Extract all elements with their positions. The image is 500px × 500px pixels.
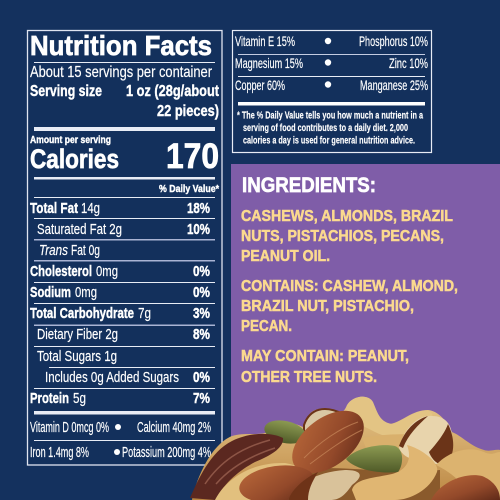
pecan [190,434,283,500]
row: cholesterol: 0mg [96,263,118,280]
text: ingredient list [241,208,453,265]
row: trans fat [39,242,100,259]
row: copper and manganese: Manganese 25% [360,77,428,93]
row: magnesium and zinc: Zinc 10% [389,55,428,71]
row: cholesterol [30,263,210,280]
row: iron and potassium [30,445,211,461]
cashew: left base [215,463,320,500]
row: iron and potassium: Potassium 200mg 4% [122,445,211,461]
almond: center [281,398,375,486]
text: daily value header: % Daily Value* [159,183,220,195]
cashew: middle [362,434,430,452]
row: total sugars: Total Sugars 1g [37,348,117,365]
row: protein: 7% [193,390,210,407]
row: vitamin e and phosphorus: Vitamin E 15% [235,33,295,49]
text: may contain: MAY CONTAIN: PEANUT, [241,348,409,365]
text: may contain: OTHER TREE NUTS. [241,369,377,386]
text: ingredient list: PEANUT OIL. [241,248,330,265]
row: total carbohydrate: Total Carbohydrate [30,305,134,322]
text: calories label: Calories [30,144,119,174]
row: protein [30,390,210,407]
heading: ingredients: INGREDIENTS: [242,173,376,197]
text: ingredient list: NUTS, PISTACHIOS, PECANS, [241,228,444,245]
row: protein: Protein [30,390,69,407]
row: sodium: 0% [193,284,210,301]
text: serving size: 1 oz (28g/about [126,83,220,100]
row: copper and manganese [235,77,428,93]
row: total carbohydrate: 7g [138,305,151,322]
text: calories value: 170 [166,137,219,176]
heading: nutrition facts: Nutrition Facts [30,30,212,61]
text: serving size [30,83,220,120]
row: dietary fiber [37,326,210,343]
cashew: top [347,397,432,437]
text: serving size: 22 pieces) [157,103,219,120]
row: total fat [30,200,210,217]
text: contains [241,278,458,335]
row: saturated fat: Saturated Fat 2g [37,221,122,238]
row: dietary fiber: Dietary Fiber 2g [37,326,118,343]
row: vitamin d and calcium: Calcium 40mg 2% [137,420,211,436]
text: amount per serving: Amount per serving [30,134,111,146]
row: trans fat: Trans [39,242,68,259]
cashew: right [436,449,500,500]
text: daily value footnote: calories a day is used for general nutrition advice. [243,134,415,146]
almond: lower right [431,475,500,500]
row: total carbohydrate: 3% [193,305,210,322]
text: daily value footnote [237,110,423,146]
text: daily value footnote: serving of food contributes to a daily diet. 2,000 [243,122,408,134]
row: sodium: Sodium [30,284,71,301]
cashew: lower [352,445,437,500]
row: copper and manganese: Copper 60% [235,77,285,93]
row: saturated fat: 10% [187,221,210,238]
pistachio: left [262,417,308,447]
row: magnesium and zinc: Magnesium 15% [235,55,303,71]
illustration: mixed nuts [190,397,500,500]
pistachio: center [346,445,402,472]
row: saturated fat [37,221,210,238]
text: servings per container: About 15 servings per container [30,64,213,81]
row: sodium [30,284,210,301]
text: contains: PECAN. [241,318,292,335]
row: vitamin d and calcium: Vitamin D 0mcg 0% [30,420,109,436]
panel: ingredients [231,164,500,500]
text: daily value footnote: * The % Daily Value tells you how much a nutrient in a [237,110,423,122]
row: vitamin e and phosphorus: Phosphorus 10% [359,33,428,49]
row: total fat: 14g [81,200,100,217]
panel: vitamins and footnote [232,30,432,152]
brazil nut: lower center [288,470,360,500]
row: total fat: Total Fat [30,200,78,217]
row: trans fat: Fat 0g [71,242,100,259]
shadow: between nuts [300,468,440,500]
text: contains: BRAZIL NUT, PISTACHIO, [241,298,414,315]
row: vitamin e and phosphorus [235,33,428,49]
row: cholesterol: 0% [193,263,210,280]
text: serving size: Serving size [30,83,102,100]
panel: nutrition facts [28,30,222,465]
row: magnesium and zinc [235,55,428,71]
row: dietary fiber: 8% [193,326,210,343]
row: sodium: 0mg [75,284,97,301]
row: added sugars: 0% [193,369,210,386]
almond: lower left [237,461,317,500]
row: total fat: 18% [187,200,210,217]
row: iron and potassium: Iron 1.4mg 8% [30,445,89,461]
brazil nut: back [304,409,343,440]
text: may contain [241,348,409,386]
text: contains: CONTAINS: CASHEW, ALMOND, [241,278,458,295]
row: protein: 5g [73,390,86,407]
row: added sugars: Includes 0g Added Sugars [45,369,179,386]
text: ingredient list: CASHEWS, ALMONDS, BRAZIL [241,208,453,225]
brazil nut: right [399,416,452,464]
row: cholesterol: Cholesterol [30,263,92,280]
